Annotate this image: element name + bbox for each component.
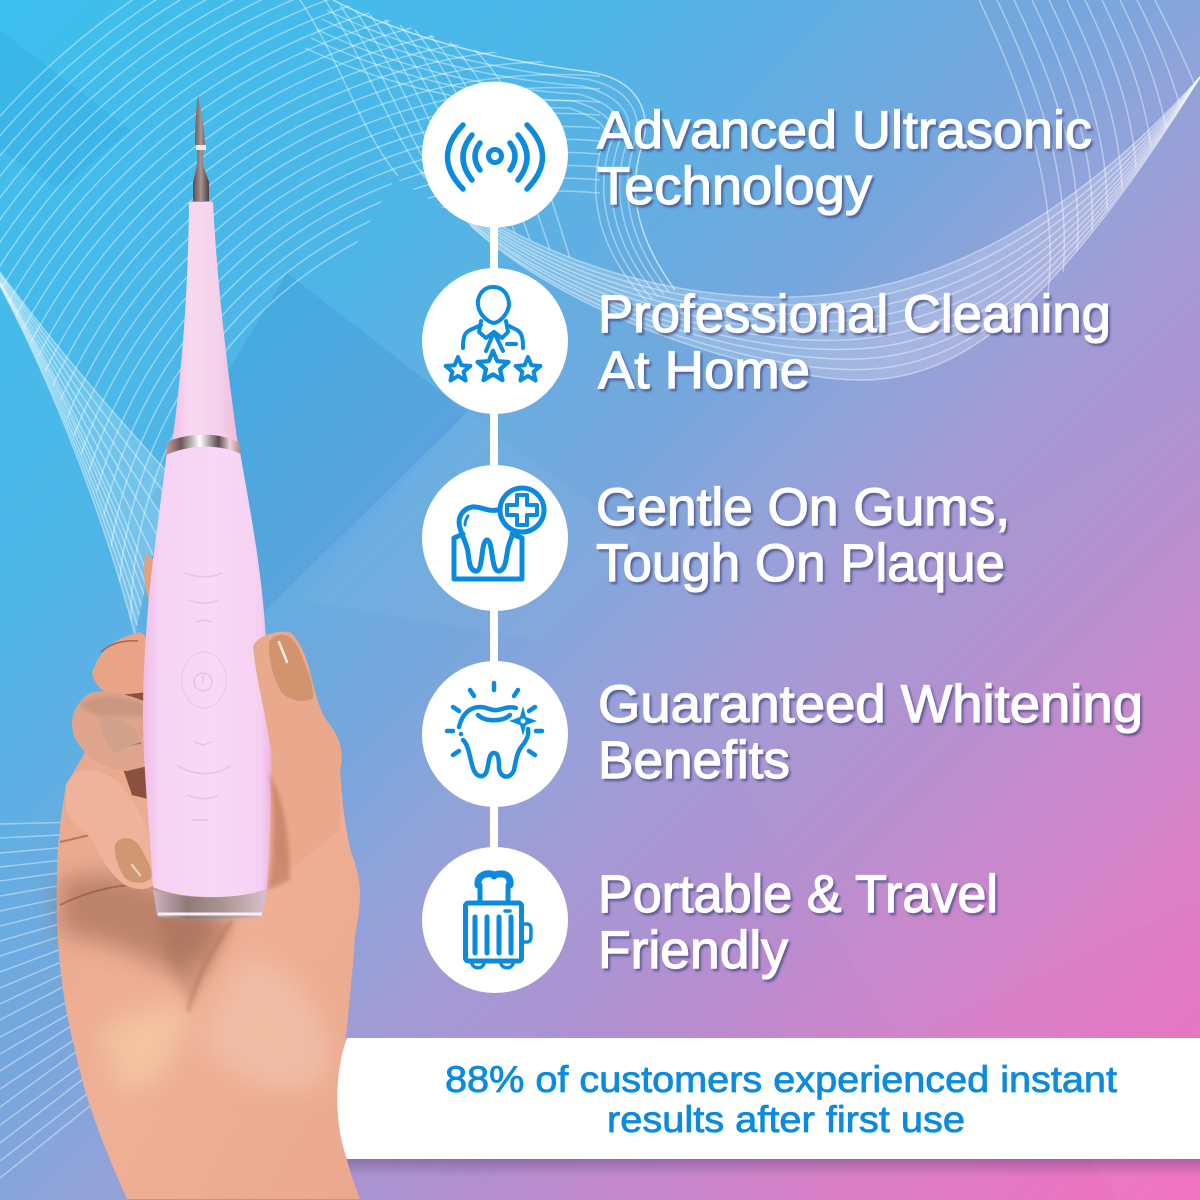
connector line between icons [490,225,498,850]
wave pattern: left ribbon [0,272,170,635]
heading: gentle on gums tough on plaque [596,478,1010,593]
bottom banner [337,1038,1200,1159]
hand: gaps between fingers [115,688,152,800]
hand: top finger [92,632,150,695]
device: button marks [178,573,230,820]
heading: guaranteed whitening benefits [598,675,1143,790]
device: clear base [153,889,267,919]
bottom banner: results after first use [607,1099,965,1140]
icon circle: professional with stars [422,268,568,414]
icon circle: whitening tooth [422,661,568,807]
hand: middle finger [72,692,152,771]
wave pattern: upper crossing grid [300,0,675,302]
heading: advanced ultrasonic technology: Technology [597,157,873,216]
hand: index finger [66,770,158,889]
heading: gentle on gums tough on plaque: Tough On Plaque [596,534,1005,593]
heading: portable and travel friendly: Portable & Travel [598,865,998,924]
heading: guaranteed whitening benefits: Guaranteed Whitening [598,675,1143,734]
heading: advanced ultrasonic technology [597,101,1092,216]
device: tapered neck [167,202,240,456]
hand: thumb and nails [100,632,342,890]
index nail [115,838,151,883]
device: silver ring [166,435,241,455]
sparkle [509,706,537,736]
heading: guaranteed whitening benefits: Benefits [598,731,790,790]
wave pattern: lower left lines [0,822,105,1178]
icon circle: ultrasonic waves [422,82,568,228]
heading: professional cleaning at home: At Home [598,341,810,400]
heading: gentle on gums tough on plaque: Gentle On Gums, [596,478,1010,537]
device: metal tip [193,95,209,201]
heading: portable and travel friendly: Friendly [598,921,788,980]
icon circle: suitcase [422,847,568,993]
device: scaler tool [143,95,271,919]
banner text: 88% of customers experienced instant [445,1059,1118,1100]
heading: advanced ultrasonic technology: Advanced Ultrasonic [597,101,1092,160]
heading: portable and travel friendly [598,865,998,980]
wave pattern: left arcs [0,0,600,620]
hand: shading under device [60,875,225,975]
wave pattern: top right fan [979,0,1195,293]
heading: professional cleaning at home [598,285,1111,400]
device: handle body [143,444,271,897]
middle nail [100,718,141,753]
heading: professional cleaning at home: Professional Cleaning [598,285,1111,344]
banner shadow [340,1159,1200,1177]
hand: palm and wrist [57,640,360,1199]
icon circle: tooth with plus [422,465,568,611]
wave pattern: central swoop [420,77,1200,380]
hand holding device [57,553,360,1199]
thumb nail [269,635,313,701]
